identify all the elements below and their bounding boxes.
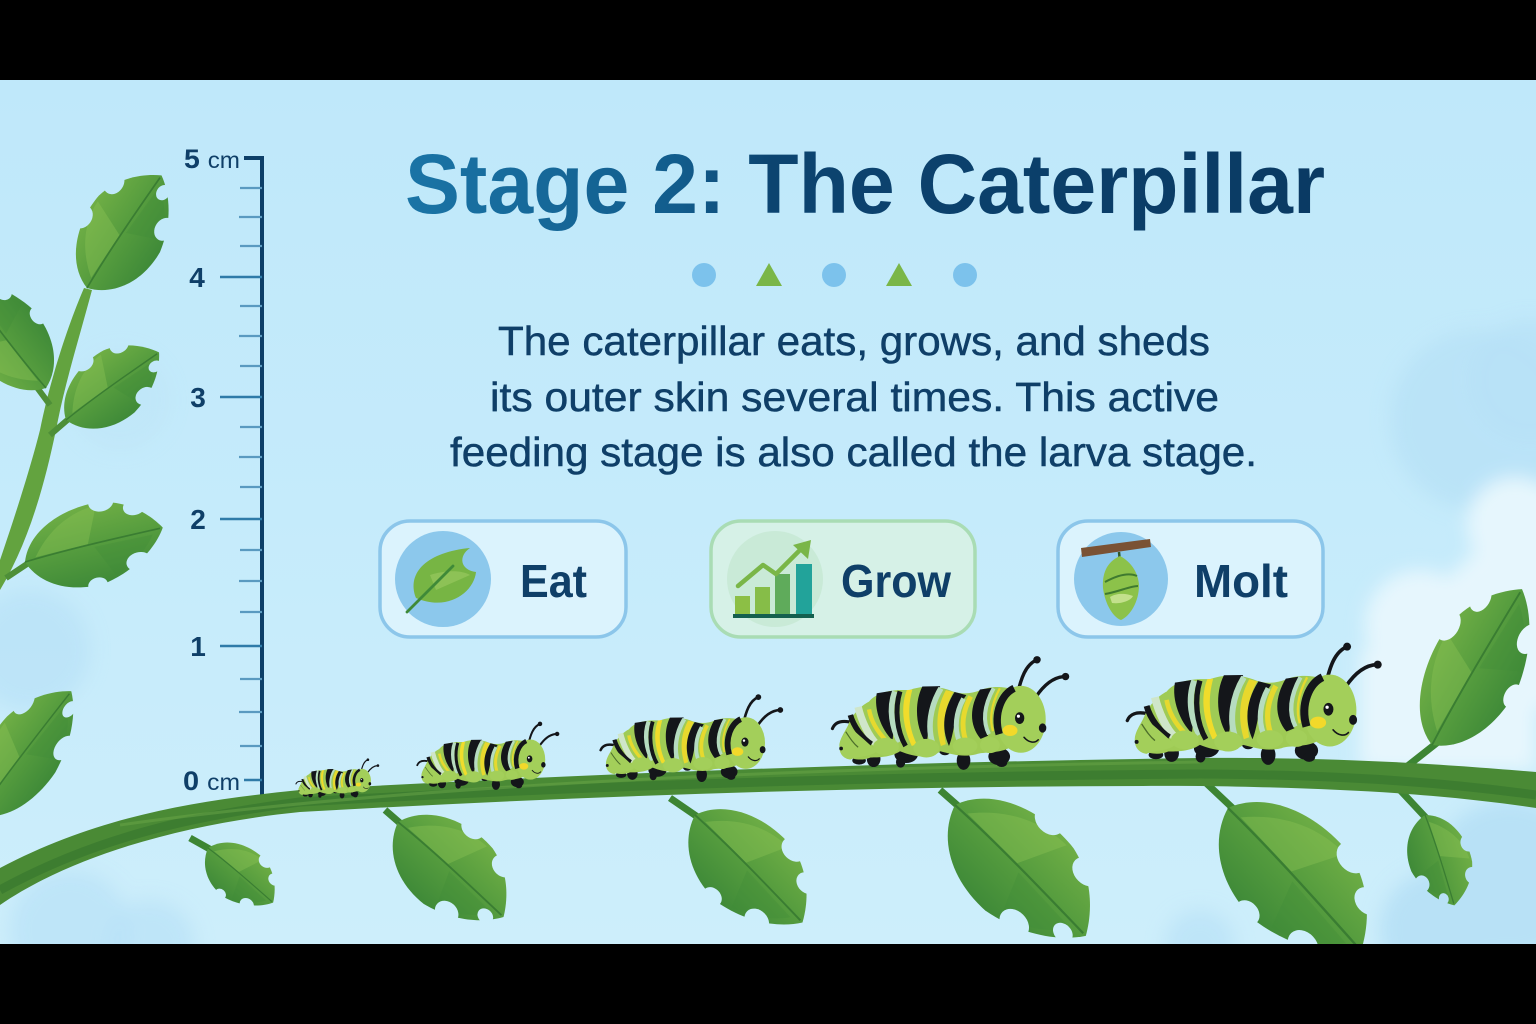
title: Stage 2: The Caterpillar xyxy=(405,137,1325,231)
pill: Molt xyxy=(1058,521,1323,637)
ruler label 0 cm: 0 cm xyxy=(183,766,240,796)
icon: chrysalis xyxy=(1074,532,1168,626)
leaf: top xyxy=(52,152,196,311)
description text xyxy=(450,318,1257,475)
leaf 2 xyxy=(369,789,533,950)
pill: Eat xyxy=(380,521,626,637)
caterpillar 3 xyxy=(601,694,783,782)
ruler xyxy=(183,144,264,803)
lower left leaf xyxy=(0,669,100,837)
description text: feeding stage is also called the larva stage. xyxy=(450,429,1257,475)
ruler label 1: 1 xyxy=(190,631,206,662)
ruler label 5 cm: 5 cm xyxy=(184,144,240,174)
ruler label 3: 3 xyxy=(190,382,206,413)
leaf 6 xyxy=(1396,805,1484,915)
leaf 7 top right xyxy=(1392,566,1536,768)
black letterbox bottom xyxy=(0,944,1536,1024)
icon: growth chart xyxy=(727,531,823,627)
leaf: mid xyxy=(46,324,179,448)
clouds xyxy=(0,320,1536,990)
caterpillar 1 xyxy=(296,758,379,798)
label: Grow: Grow xyxy=(841,555,951,607)
branch leaves xyxy=(190,566,1536,990)
ruler label 4: 4 xyxy=(189,262,205,293)
label: Eat: Eat xyxy=(520,555,587,607)
leaf 4 xyxy=(917,767,1124,974)
dots and triangles divider xyxy=(692,263,977,287)
leaf 1 xyxy=(190,827,291,924)
description text: The caterpillar eats, grows, and sheds xyxy=(498,318,1210,364)
caterpillars growing in size xyxy=(296,643,1382,798)
description text: its outer skin several times. This active xyxy=(490,374,1219,420)
caterpillar 5 xyxy=(1127,643,1382,765)
caterpillar 2 xyxy=(417,722,559,790)
leaf: lower xyxy=(15,488,172,601)
caterpillar 4 xyxy=(832,656,1069,770)
main branch xyxy=(0,742,1536,905)
black letterbox top xyxy=(0,0,1536,80)
pill: Grow xyxy=(711,521,975,637)
leaf 3 xyxy=(663,782,835,955)
ruler label 2: 2 xyxy=(190,504,206,535)
left vine with leaves xyxy=(0,152,196,601)
label: Molt: Molt xyxy=(1194,555,1288,607)
icon: bitten leaf xyxy=(395,531,491,627)
leaf: left xyxy=(0,258,76,412)
leaf 5 xyxy=(1186,768,1403,990)
